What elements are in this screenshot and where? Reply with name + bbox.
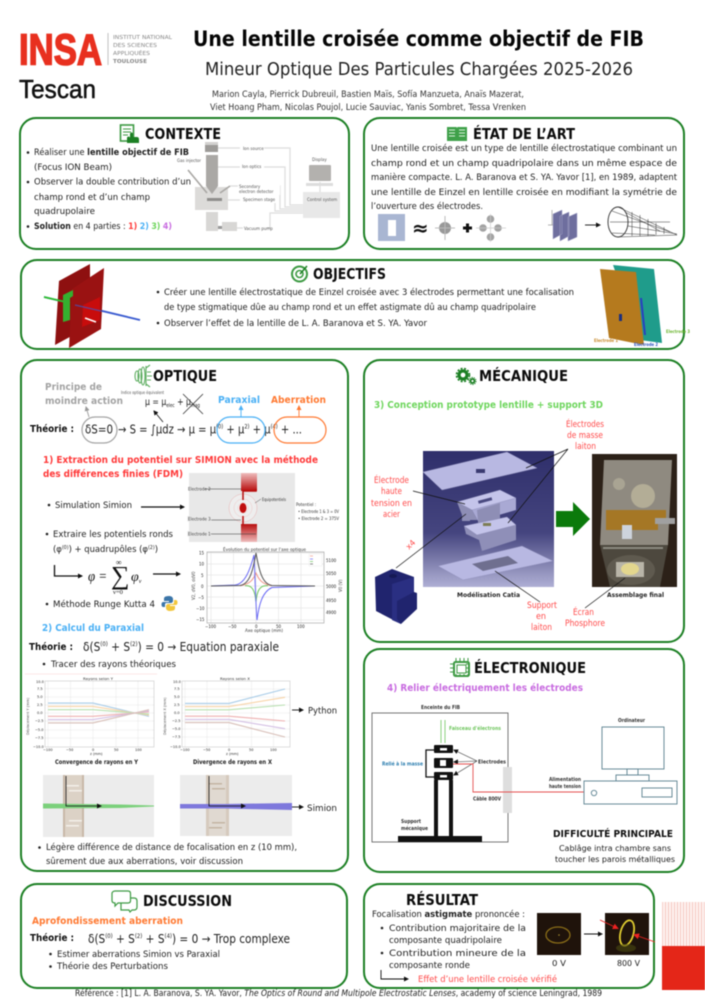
chart: évolution du potentiel: 100 bbox=[297, 624, 305, 629]
logo: INSA Toulouse: APPLIQUÉES bbox=[113, 49, 150, 57]
chart: évolution du potentiel: −10 bbox=[196, 606, 205, 611]
heading: état de l'art: ÉTAT DE L’ART bbox=[473, 124, 576, 143]
label: support en laiton: en bbox=[536, 612, 546, 622]
bullet: potentiels: (2) bbox=[148, 545, 155, 551]
icon: light beam bbox=[135, 365, 152, 387]
diagram: FIB instrument: Secondary bbox=[239, 184, 261, 189]
logo: INSA Toulouse: INSTITUT NATIONAL bbox=[113, 35, 173, 41]
chart: rayons selon Y: 10.0 bbox=[36, 680, 44, 684]
label: écran phosphore: Écran bbox=[573, 606, 594, 618]
formula: phi sum: ν bbox=[139, 579, 142, 585]
formula: equivalent optical index: mag bbox=[191, 403, 200, 409]
logo: Tescan: Tescan bbox=[19, 74, 96, 104]
symbol: approximately: ≈ bbox=[412, 216, 429, 240]
text block: état de l'art: manière compacte. L. A. Baranova et S. YA. Yavor [1], en 1989, adaptent bbox=[371, 172, 678, 183]
formula: phi sum: ∞ bbox=[116, 558, 122, 567]
formula: trop complexe: Théorie : bbox=[30, 932, 74, 944]
formula: théorie: + ... bbox=[278, 422, 302, 436]
formula: phi sum: ∑ bbox=[111, 561, 130, 590]
bullet list: discussion: Estimer aberrations Simion vs Paraxial bbox=[57, 950, 220, 960]
arrow: elbow bbox=[381, 970, 408, 979]
image: simion divergence bbox=[180, 775, 292, 836]
formula: paraxial: (2) bbox=[130, 641, 138, 648]
chart: rayons selon X: −2.5 bbox=[172, 719, 180, 723]
panel: objectifs bbox=[21, 260, 690, 349]
chart: rayons selon X: 5.0 bbox=[174, 695, 180, 699]
bullet list: contexte: (Focus ION Beam) bbox=[34, 163, 112, 173]
diagram: FIB chamber wiring: Relié à la masse bbox=[382, 760, 424, 768]
icon: target bbox=[292, 266, 307, 282]
heading: mécanique: MÉCANIQUE bbox=[479, 366, 568, 385]
heading: calcul du paraxial: 2) Calcul du Paraxial bbox=[42, 623, 144, 634]
chart: rayons selon Y: 2.5 bbox=[37, 703, 43, 707]
formula: théorie: 2) bbox=[244, 424, 249, 430]
chart: rayons selon Y: 100 bbox=[135, 748, 142, 752]
arrow: green bbox=[556, 502, 590, 536]
bullet list: objectifs bbox=[157, 287, 574, 329]
chart: rayons selon X: Déplacement X (mm) bbox=[163, 697, 167, 735]
label: électrodes de masse: Électrodes bbox=[566, 418, 604, 430]
chart: rayons selon X: 100 bbox=[270, 748, 277, 752]
text block: état de l'art: Une lentille croisée est un type de lentille électrostatique combinant un bbox=[371, 143, 677, 154]
chart: évolution du potentiel: 0 bbox=[201, 584, 204, 589]
formula: trop complexe bbox=[30, 932, 290, 946]
image: catia model bbox=[423, 451, 554, 587]
formula: théorie: Théorie : bbox=[30, 423, 74, 435]
diagram: FIB instrument: Vacuum pump bbox=[244, 226, 273, 231]
image: simion potential simulation bbox=[188, 473, 339, 542]
panel: discussion bbox=[21, 884, 347, 988]
diagram: FIB chamber wiring: Support bbox=[401, 819, 422, 825]
formula: paraxial: ) = 0 → Equation paraxiale bbox=[138, 640, 279, 654]
callout: difficulté principale: DIFFICULTÉ PRINCIPALE bbox=[553, 828, 673, 840]
diagram: computer and power supply: Ordinateur bbox=[618, 718, 645, 724]
subtitle: Mineur Optique Des Particules Chargées 2025-2026 bbox=[205, 60, 633, 80]
formula: théorie bbox=[30, 406, 326, 443]
label: électrode haute tension: haute bbox=[381, 487, 402, 497]
heading: électronique: ÉLECTRONIQUE bbox=[474, 658, 586, 677]
subheading: relier les électrodes: 4) Relier électriquement les électrodes bbox=[387, 683, 583, 694]
label: électrode haute tension: Électrode bbox=[374, 474, 409, 486]
formula: paraxial: δ(S bbox=[83, 640, 103, 654]
illustration: red electrodes with beam bbox=[44, 264, 140, 348]
panel: état de l'art bbox=[364, 118, 684, 249]
image: simion potential simulation: Equipotentiels bbox=[262, 497, 286, 502]
chart: rayons selon X: −7.5 bbox=[172, 735, 180, 739]
bullet: simulation simion: Simulation Simion bbox=[55, 501, 132, 511]
text block: état de l'art: champ rond et un champ quadripolaire dans un même espace de bbox=[371, 158, 677, 169]
bullet list: objectifs: Créer une lentille électrostatique de Einzel croisée avec 3 électrodes permettant une focalisation bbox=[164, 287, 574, 298]
chart: évolution du potentiel: 5050 bbox=[326, 571, 337, 576]
chart: rayons selon X: 50 bbox=[249, 748, 253, 752]
chart: rayons selon X: −100 bbox=[180, 748, 190, 752]
diagram: FIB chamber wiring: Enceinte du FIB bbox=[421, 705, 460, 711]
formula: paraxial: + S bbox=[108, 640, 130, 654]
formula: trop complexe: (2) bbox=[135, 933, 142, 940]
chart: rayons selon Y: 0 bbox=[92, 748, 94, 752]
logo: INSA Toulouse: INSA bbox=[19, 26, 102, 74]
chart: rayons selon Y: −2.5 bbox=[35, 719, 44, 723]
heading: extraction du potentiel: des différences finies (FDM) bbox=[43, 469, 183, 480]
chart: rayons selon X bbox=[163, 676, 290, 766]
diagram: computer and power supply bbox=[549, 718, 677, 804]
label: x4: x4 bbox=[404, 538, 417, 551]
icon: microchip bbox=[450, 658, 472, 679]
formula: trop complexe: + S bbox=[113, 932, 135, 946]
chart: rayons selon X: 10.0 bbox=[173, 680, 181, 684]
chart: rayons selon X: 0.0 bbox=[174, 711, 180, 715]
icon: round field bbox=[435, 216, 455, 240]
panel: optique bbox=[21, 360, 348, 871]
reference line: Référence : [1] L. A. Baranova, S. YA. Yavor, The Optics of Round and Multipole Electrostatic Lenses, academy of science Leningrad, 1989 bbox=[75, 988, 602, 998]
callout: difficulté principale: Cablâge intra chambre sans bbox=[559, 843, 671, 853]
image: beam at 0 V bbox=[537, 913, 581, 955]
chart: rayons selon Y: 7.5 bbox=[37, 687, 43, 691]
arrow bbox=[153, 573, 180, 575]
conclusion: lentille croisée vérifiée: Effet d’une lentille croisée vérifié bbox=[418, 974, 557, 985]
panel: mécanique bbox=[364, 360, 684, 642]
bullet: potentiels: (0) bbox=[62, 545, 69, 551]
bullet list: contexte: Réaliser une lentille objectif de FIB bbox=[34, 147, 189, 158]
image: support block bbox=[375, 569, 417, 624]
diagram: FIB chamber wiring: mécanique bbox=[401, 825, 429, 832]
formula: paraxial bbox=[29, 640, 279, 654]
bullet: potentiels: (φ bbox=[53, 545, 62, 555]
icon: electrode plates bbox=[548, 210, 577, 241]
formula: phi sum: ν=0 bbox=[113, 589, 123, 596]
formula: théorie: + μ bbox=[249, 422, 271, 436]
chart: rayons selon Y: Déplacement Y (mm) bbox=[26, 697, 30, 735]
label: simion bbox=[292, 804, 337, 814]
chart: évolution du potentiel: 10 bbox=[199, 562, 205, 566]
image: simion potential simulation: Electrode 1 bbox=[188, 532, 211, 536]
chart: évolution du potentiel: 4950 bbox=[326, 598, 337, 603]
formula: equivalent optical index: μ = μ bbox=[145, 397, 171, 408]
label: principe de moindre action: moindre action bbox=[45, 396, 123, 407]
logo: INSA Toulouse bbox=[19, 26, 173, 74]
chart: évolution du potentiel: 4900 bbox=[326, 610, 337, 615]
logo: INSA Toulouse: DES SCIENCES bbox=[113, 43, 157, 49]
label: aberration: Aberration bbox=[271, 395, 326, 406]
image: beam at 800 V bbox=[600, 913, 655, 955]
arrow bbox=[584, 933, 602, 935]
label: électrodes de masse: de masse bbox=[567, 431, 603, 441]
chart: rayons selon X: −5.0 bbox=[172, 727, 180, 731]
formula: théorie: → S = ∫μdz → μ = μ bbox=[118, 422, 236, 436]
diagram: FIB instrument: Specimen stage bbox=[243, 197, 276, 202]
heading: extraction du potentiel: 1) Extraction du potentiel sur SIMION avec la méthode bbox=[43, 455, 318, 466]
image: assembled prototype photo bbox=[592, 454, 677, 587]
formula: phi sum: φ bbox=[131, 570, 139, 585]
label: principe de moindre action: Principe de bbox=[45, 382, 102, 393]
caption: modélisation catia: Modélisation Catia bbox=[457, 591, 520, 599]
diagram: FIB instrument: Gas injector bbox=[177, 158, 201, 163]
illustration: three electrodes: Electrode 1 bbox=[594, 338, 618, 344]
label: paraxial: Paraxial bbox=[218, 395, 260, 406]
text block: état de l'art: l’ouverture des électrodes. bbox=[371, 201, 483, 212]
chart: évolution du potentiel: 50 bbox=[276, 624, 282, 629]
label: support en laiton: Support bbox=[527, 601, 558, 611]
text block: état de l'art bbox=[371, 143, 678, 212]
text block: état de l'art: une lentille de Einzel en lentille croisée en modifiant la symétrie de bbox=[371, 187, 677, 198]
bullet list: contexte: champ rond et d’un champ bbox=[34, 193, 150, 203]
diagram: FIB instrument: Display bbox=[312, 157, 327, 162]
formula: paraxial: (0) bbox=[100, 641, 108, 648]
chart: rayons selon Y: −7.5 bbox=[35, 736, 44, 740]
bullet list: discussion: Théorie des Perturbations bbox=[56, 961, 168, 972]
chart: évolution du potentiel: −50 bbox=[228, 624, 237, 629]
label: électrode haute tension bbox=[371, 474, 466, 568]
label: simion: Simion bbox=[307, 804, 337, 814]
formula: paraxial: Théorie : bbox=[29, 641, 73, 653]
label: électrodes de masse: laiton bbox=[575, 442, 596, 452]
diagram: beam cone bbox=[608, 207, 677, 237]
authors: Marion Cayla, Pierrick Dubreuil, Bastien Maïs, Sofía Manzueta, Anaïs Mazerat, bbox=[212, 89, 524, 99]
chart: évolution du potentiel: 5100 bbox=[326, 558, 337, 563]
chart: rayons selon X: −50 bbox=[203, 748, 210, 752]
diagram: computer and power supply: haute tension bbox=[549, 784, 581, 790]
text block: focalisation astigmate: composante ronde bbox=[389, 961, 470, 971]
chart: rayons selon Y: Convergence de rayons en Y bbox=[55, 758, 138, 766]
icon: gears bbox=[456, 368, 476, 384]
icon: quadrupole field bbox=[476, 214, 506, 242]
image: simion potential simulation: Potentiel : bbox=[296, 502, 316, 507]
diagram: FIB chamber wiring: Electrodes bbox=[478, 760, 506, 766]
formula: equivalent optical index: Indice optique équivalent bbox=[121, 390, 164, 395]
panel: électronique bbox=[364, 649, 684, 872]
chart: évolution du potentiel: Évolution du potentiel sur l'axe optique bbox=[223, 545, 306, 553]
illustration: three electrodes bbox=[594, 265, 690, 348]
chart: évolution du potentiel: −15 bbox=[196, 617, 205, 622]
bullet list: objectifs: Observer l’effet de la lentille de L. A. Baranova et S. YA. Yavor bbox=[164, 319, 427, 329]
panel: résultat bbox=[364, 884, 655, 988]
formula: théorie: (4) bbox=[271, 424, 278, 430]
formula: trop complexe: + S bbox=[142, 932, 165, 946]
chart: rayons selon Y: −10.0 bbox=[33, 745, 44, 749]
icon: cross lens aperture bbox=[378, 214, 405, 241]
text block: focalisation astigmate: Contribution mineure de la bbox=[389, 949, 526, 959]
logo: INSA stripes and red block bbox=[662, 902, 705, 990]
icon: python bbox=[162, 596, 178, 611]
image: simion convergence bbox=[43, 775, 154, 837]
formula: phi sum: φ = bbox=[88, 569, 107, 585]
chart: évolution du potentiel: −100 bbox=[205, 624, 216, 629]
bullet: différence de focalisation: sûrement due aux aberrations, voir discussion bbox=[46, 857, 243, 867]
formula: trop complexe: (0) bbox=[105, 933, 113, 940]
bullet list: discussion bbox=[49, 950, 220, 972]
label: électrode haute tension: acier bbox=[383, 510, 400, 520]
illustration: three electrodes: Electrode 2 bbox=[634, 342, 658, 348]
diagram: FIB instrument: Control system bbox=[307, 197, 337, 202]
chart: rayons selon X: Rayons selon X bbox=[220, 676, 250, 681]
chart: évolution du potentiel: −5 bbox=[198, 595, 204, 600]
subheading: conception prototype: 3) Conception prototype lentille + support 3D bbox=[374, 400, 603, 411]
chart: rayons selon Y: Rayons selon Y bbox=[83, 676, 114, 681]
bullet list: objectifs: de type stigmatique dûe au champ rond et un effet astigmate dû au champ quadripolaire bbox=[164, 303, 536, 313]
diagram: FIB instrument bbox=[177, 142, 340, 232]
chart: rayons selon X: z (mm) bbox=[226, 752, 239, 756]
label: python bbox=[292, 706, 337, 716]
chart: rayons selon X: 2.5 bbox=[174, 703, 180, 707]
label: électrode haute tension: tension en bbox=[371, 499, 412, 509]
icon: document and hand bbox=[120, 125, 139, 143]
label: écran phosphore: Phosphore bbox=[565, 619, 605, 629]
chart: rayons selon Y: −100 bbox=[43, 748, 53, 752]
diagram: FIB instrument: electron detector bbox=[239, 189, 274, 194]
heading: discussion: DISCUSSION bbox=[143, 892, 232, 910]
icon: open book bbox=[447, 127, 467, 141]
chart: évolution du potentiel: 15 bbox=[199, 550, 205, 556]
authors bbox=[210, 89, 526, 112]
text block: focalisation astigmate: Contribution majoritaire de la bbox=[389, 924, 526, 934]
panel: contexte bbox=[20, 118, 349, 249]
chart: rayons selon Y: 5.0 bbox=[37, 695, 43, 699]
bullet list: contexte: Solution en 4 parties : 1) 2) 3) 4) bbox=[34, 222, 172, 232]
formula: trop complexe: ) = 0 → Trop complexe bbox=[172, 932, 290, 946]
chart: évolution du potentiel: 5 bbox=[201, 573, 204, 578]
chart: évolution du potentiel: V0 (V) bbox=[338, 579, 343, 592]
chart: évolution du potentiel: V2, dV0, ddV0 bbox=[191, 571, 196, 600]
diagram: FIB chamber wiring: Faisceau d'électrons bbox=[449, 725, 501, 732]
title: Une lentille croisée comme objectif de FIB bbox=[193, 27, 644, 52]
formula: théorie: (0) bbox=[216, 424, 223, 430]
formula: théorie: + μ bbox=[223, 422, 245, 436]
label: électrodes de masse bbox=[508, 418, 604, 523]
image: simion potential simulation: Electrode 3 bbox=[188, 516, 211, 522]
diagram: computer and power supply: Alimentation bbox=[549, 777, 581, 783]
image: simion potential simulation: • Electrode 2 = 375V bbox=[298, 516, 339, 521]
arrow bbox=[585, 224, 600, 226]
bullet: potentiels: ) bbox=[155, 545, 158, 555]
bullet: potentiels: ) + quadrupôles (φ bbox=[69, 544, 148, 555]
caption: 800 V: 800 V bbox=[617, 958, 640, 968]
bullet: runge kutta: Méthode Runge Kutta 4 bbox=[53, 599, 155, 610]
bullet: simulation simion bbox=[48, 501, 184, 511]
diagram: FIB instrument: Ion optics bbox=[242, 164, 261, 169]
text block: focalisation astigmate bbox=[372, 909, 526, 971]
formula: théorie: δS=0 bbox=[85, 422, 113, 436]
chart: rayons selon X: −10.0 bbox=[170, 745, 181, 749]
authors: Viet Hoang Pham, Nicolas Poujol, Lucie Sauviac, Yanis Sombret, Tessa Vrenken bbox=[210, 102, 526, 112]
caption: 0 V: 0 V bbox=[552, 958, 566, 968]
text block: focalisation astigmate: composante quadripolaire bbox=[389, 936, 502, 946]
formula: equivalent optical index bbox=[121, 390, 203, 414]
chart: rayons selon X: 7.5 bbox=[174, 687, 180, 691]
formula: trop complexe: δ(S bbox=[88, 932, 108, 946]
chart: évolution du potentiel: 0 bbox=[255, 624, 258, 629]
label: écran phosphore bbox=[565, 578, 625, 629]
chart: rayons selon Y bbox=[25, 674, 157, 766]
bullet list: contexte bbox=[27, 147, 191, 232]
formula: phi sum bbox=[88, 558, 142, 596]
bullet list: contexte: quadrupolaire bbox=[34, 207, 95, 217]
chart: rayons selon Y: 50 bbox=[114, 748, 118, 752]
callout: difficulté principale bbox=[553, 828, 675, 864]
heading: extraction du potentiel bbox=[43, 455, 318, 480]
chart: rayons selon Y: 0.0 bbox=[37, 711, 43, 715]
chart: rayons selon Y: −50 bbox=[66, 748, 73, 752]
callout: difficulté principale: toucher les parois métalliques bbox=[555, 854, 675, 864]
chart: évolution du potentiel: Axe optique (mm) bbox=[245, 628, 283, 634]
diagram: FIB instrument: Ion source bbox=[243, 146, 264, 151]
logo: INSA Toulouse: TOULOUSE bbox=[113, 59, 147, 65]
formula: trop complexe: (4) bbox=[165, 933, 172, 940]
image: simion potential simulation: • Electrode 1 & 3 = 0V bbox=[298, 509, 339, 514]
bullet: différence de focalisation: Légère différence de distance de focalisation en z (10 mm), bbox=[46, 842, 297, 853]
text block: focalisation astigmate: Focalisation astigmate prononcée : bbox=[372, 909, 525, 920]
subheading: aprofondissement aberration: Aprofondissement aberration bbox=[32, 916, 183, 927]
bullet: potentiels bbox=[46, 530, 173, 555]
arrow: elbow bbox=[54, 565, 82, 576]
bullet: tracer des rayons: Tracer des rayons théoriques bbox=[50, 659, 176, 670]
bullet: potentiels: Extraire les potentiels ronds bbox=[53, 530, 173, 540]
chart: rayons selon X: 0 bbox=[228, 748, 230, 752]
bullet list: contexte: Observer la double contribution d’un bbox=[34, 178, 191, 188]
diagram: FIB chamber wiring bbox=[372, 705, 593, 842]
heading: optique: OPTIQUE bbox=[153, 367, 217, 385]
heading: contexte: CONTEXTE bbox=[145, 125, 221, 143]
label: principe de moindre action bbox=[45, 382, 123, 407]
label: python: Python bbox=[308, 706, 337, 716]
bullet: différence de focalisation bbox=[38, 842, 297, 867]
illustration: three electrodes: Electrode 3 bbox=[666, 329, 690, 335]
heading: résultat: RÉSULTAT bbox=[406, 890, 479, 909]
chart: évolution du potentiel bbox=[191, 545, 343, 634]
chart: rayons selon Y: −5.0 bbox=[35, 728, 44, 732]
caption: assemblage final: Assemblage final bbox=[607, 591, 664, 599]
label: support en laiton bbox=[495, 571, 558, 633]
image: simion potential simulation: Electrode 2 bbox=[188, 486, 211, 492]
symbol: plus bbox=[463, 224, 472, 232]
formula: equivalent optical index: + μ bbox=[175, 397, 191, 408]
chart: rayons selon Y: z (mm) bbox=[90, 752, 103, 756]
chart: évolution du potentiel: 5000 bbox=[326, 584, 337, 589]
chart: rayons selon X: Divergence de rayons en X bbox=[193, 758, 272, 766]
label: support en laiton: laiton bbox=[531, 623, 552, 633]
heading: objectifs: OBJECTIFS bbox=[313, 265, 386, 283]
icon: speech bubbles bbox=[112, 891, 137, 912]
diagram: FIB chamber wiring: Câble 800V bbox=[473, 796, 501, 802]
formula: equivalent optical index: elec bbox=[166, 403, 175, 409]
